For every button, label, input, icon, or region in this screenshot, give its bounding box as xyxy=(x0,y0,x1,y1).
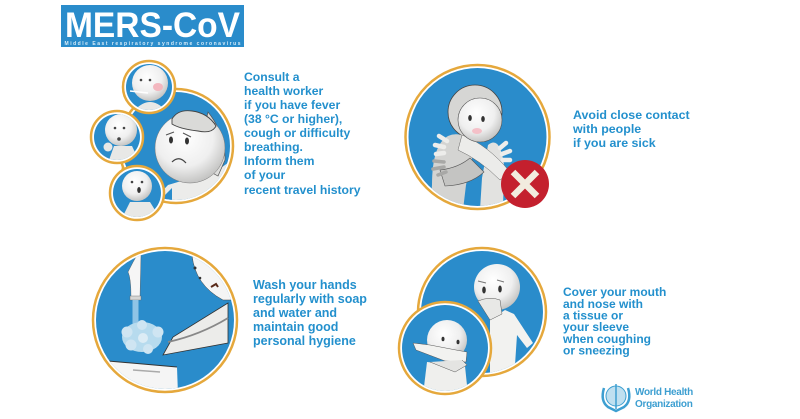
icon: WHO emblem xyxy=(603,384,629,411)
panel: cover your mouth xyxy=(399,248,670,395)
text: avoid close contact: with people xyxy=(572,122,641,136)
text: cover your mouth: Cover your mouth xyxy=(563,285,666,299)
text: cover your mouth: or sneezing xyxy=(563,344,630,358)
text: avoid close contact: Avoid close contact xyxy=(573,108,690,122)
text: cover your mouth: your sleeve xyxy=(563,320,629,334)
icon: hand washing under tap xyxy=(93,248,240,395)
text: consult advice: cough or difficulty xyxy=(244,126,351,140)
icon: difficulty breathing xyxy=(110,166,164,220)
icon: person coughing into sleeve xyxy=(399,302,491,395)
text: wash hands: maintain good xyxy=(253,320,338,334)
panel: avoid close contact xyxy=(406,65,693,210)
icon: person using tissue xyxy=(418,248,546,380)
text: consult advice: Consult a xyxy=(244,70,300,84)
text: WHO name: Organization xyxy=(635,399,693,410)
text: consult advice: health worker xyxy=(244,84,323,98)
text: avoid close contact: if you are sick xyxy=(573,136,656,150)
text: consult advice: Inform them xyxy=(244,154,315,168)
text: wash hands: personal hygiene xyxy=(253,334,356,348)
text: cover your mouth: and nose with xyxy=(563,297,643,311)
text: consult advice: if you have fever xyxy=(244,98,340,112)
panel: consult a health worker xyxy=(91,61,361,220)
text: WHO name: World Health xyxy=(635,387,693,398)
panel: wash your hands xyxy=(93,248,370,395)
text: cover your mouth: when coughing xyxy=(562,332,651,346)
icon: coughing person xyxy=(91,111,143,163)
icon: two people hugging xyxy=(406,65,550,210)
text: consult advice: recent travel history xyxy=(244,183,361,197)
text: cover your mouth: a tissue or xyxy=(563,308,623,322)
text: consult advice: of your xyxy=(244,168,286,182)
text: consult advice: breathing. xyxy=(244,140,303,154)
text: consult advice: (38 °C or higher), xyxy=(244,112,342,126)
text: wash hands: Wash your hands xyxy=(253,278,357,292)
title banner: MERS-CoV: MERS-CoV xyxy=(65,6,241,45)
icon: thermometer fever xyxy=(123,61,175,113)
title banner: MERS-CoV: Middle East respiratory syndrome coronavirus xyxy=(64,41,241,47)
logo: World Health Organization xyxy=(603,384,695,411)
text: wash hands: and water and xyxy=(253,306,337,320)
text: wash hands: regularly with soap xyxy=(253,292,367,306)
icon: red cross xyxy=(501,160,549,208)
icon: person with fever holding forehead xyxy=(119,89,233,204)
